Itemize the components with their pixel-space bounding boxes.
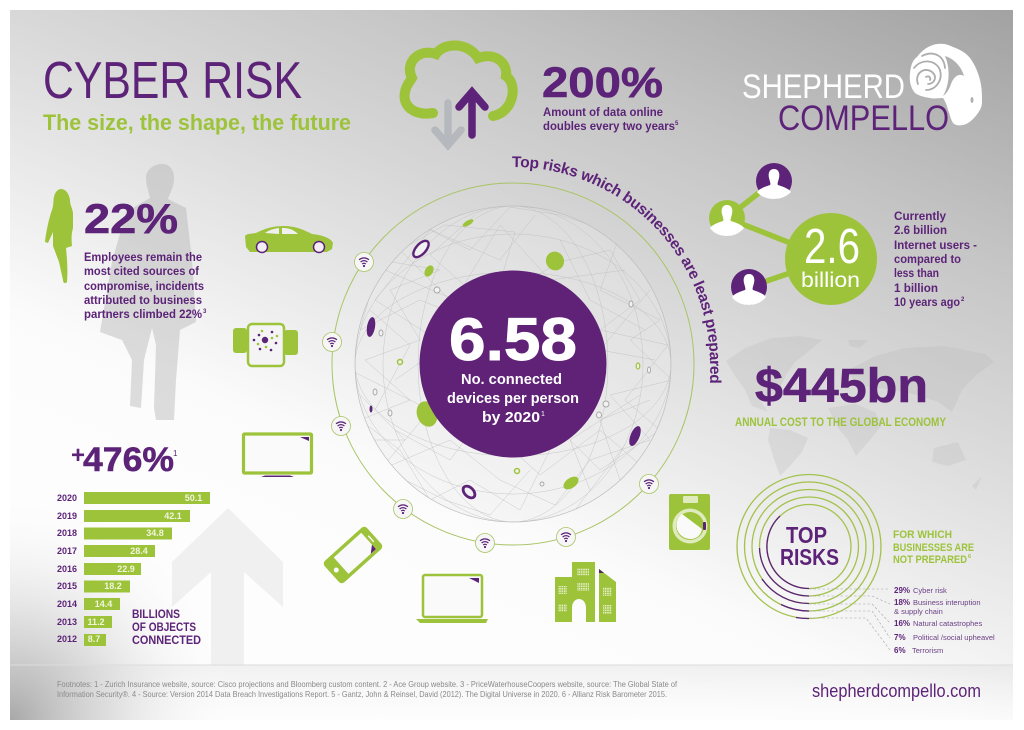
orbit ring [332, 183, 694, 545]
central stat circle: devices per person [447, 390, 579, 407]
list: top risks: Business interuption [913, 598, 981, 607]
logo: Shepherd Compello: COMPELLO [778, 99, 949, 138]
top risks rings: TOP [786, 522, 827, 548]
wifi badges on orbit [322, 252, 658, 552]
subtitle: The size, the shape, the future [43, 110, 351, 135]
bar chart: billions of objects connected: 2020 [57, 493, 77, 503]
website url: shepherdcompello.com [812, 680, 981, 701]
central stat circle: 1 [541, 411, 545, 418]
central stat circle: 6.58 [449, 306, 577, 373]
icon: smartphone [322, 525, 384, 585]
bar chart: billions of objects connected: 2015 [57, 581, 77, 591]
footnotes [57, 679, 678, 699]
stat: 22% employees: Employees remain the [84, 252, 202, 264]
dashed leader lines [809, 589, 890, 650]
chart label: BILLIONS [132, 609, 180, 621]
list: top risks: 29% [894, 586, 910, 595]
icon: washing machine [669, 494, 710, 550]
stat: 200%: 5 [675, 121, 679, 127]
bar chart: billions of objects connected: 2013 [57, 617, 77, 627]
stat: 22% employees: most cited sources of [84, 266, 199, 278]
list: top risks: Terrorism [912, 646, 943, 655]
bar chart: billions of objects connected: 18.2 [104, 581, 122, 591]
central stat circle: No. connected [461, 371, 562, 388]
text: for which businesses are not prepared [893, 529, 974, 566]
top risks rings: RISKS [780, 544, 839, 570]
stat: 200%: Amount of data online [543, 107, 663, 119]
bar chart: billions of objects connected: 50.1 [185, 493, 202, 503]
ghost businessman silhouette [100, 164, 196, 420]
stat: 22% employees: attributed to business [84, 295, 202, 307]
stat: $445bn: ANNUAL COST TO THE GLOBAL ECONOMY [735, 415, 946, 429]
text: for which businesses are not prepared: 6 [968, 554, 971, 560]
text: internet users [894, 211, 977, 309]
text: internet users: Internet users - [894, 240, 977, 252]
footnotes: Information Security®. 4 - Source: Version 2014 Data Breach Investigations Report. 5 - Gantz, John & Reinsel, David (2012). The Digital Universe in 2020. 6 - Allianz Risk Barometer 2015. [57, 689, 667, 699]
text: internet users: less than [894, 268, 939, 280]
stat: 200% [542, 59, 679, 133]
world map backdrop [726, 336, 994, 490]
title [43, 52, 351, 135]
bar chart: billions of objects connected: 2014 [57, 599, 77, 609]
central stat circle: by 2020 [482, 409, 540, 426]
stat: $445bn [735, 360, 946, 429]
icon: car [245, 226, 333, 252]
bar chart: billions of objects connected: 2018 [57, 528, 77, 538]
list: top risks: 18% [894, 598, 910, 607]
text: for which businesses are not prepared: NOT PREPARED [893, 554, 967, 566]
list: top risks: & supply chain [894, 607, 943, 616]
title: CYBER RISK [43, 52, 302, 110]
stat: 22% employees [45, 189, 207, 321]
stat: 22% employees: compromise, incidents [84, 281, 204, 293]
icon: ram head [910, 44, 982, 125]
globe markers [365, 218, 643, 500]
+476% heading: + [71, 442, 85, 469]
icon: office buildings [555, 562, 616, 622]
globe nodes [373, 287, 650, 486]
bar chart: billions of objects connected [57, 492, 210, 647]
footnotes: Footnotes: 1 - Zurich Insurance website, source: Cisco projections and Bloomberg custom content. 2 - Ace Group website. 3 - PriceWaterhouseCoopers website, source: The Global State of [57, 679, 678, 689]
text: for which businesses are not prepared: BUSINESSES ARE [893, 542, 974, 554]
globe network [350, 206, 672, 522]
bar chart: billions of objects connected: 2017 [57, 546, 77, 556]
list: top risks: 7% [894, 633, 906, 642]
list: top risks: Natural catastrophes [913, 619, 982, 628]
ghost arrow backdrop [172, 508, 283, 665]
person node top [756, 163, 792, 199]
+476% heading: 1 [173, 449, 178, 458]
text: internet users: Currently [894, 211, 947, 223]
bar chart: billions of objects connected: 2016 [57, 564, 77, 574]
2.6 billion circle: billion [801, 269, 860, 292]
list: top risks: Cyber risk [913, 586, 947, 595]
person node left [709, 200, 745, 236]
bar chart: billions of objects connected: 2019 [57, 511, 77, 521]
text: internet users: 1 billion [894, 283, 938, 295]
central stat circle [420, 270, 606, 458]
list: top risks: Political /social upheavel [913, 633, 995, 642]
curved heading: top risks: Top risks which businesses are least prepared [512, 156, 722, 383]
bar chart: billions of objects connected: 28.4 [130, 546, 148, 556]
stat: 22% employees: 22% [84, 195, 178, 242]
bar chart: billions of objects connected: 22.9 [117, 564, 135, 574]
bar chart: billions of objects connected: 2012 [57, 634, 77, 644]
logo: Shepherd Compello: SHEPHERD [742, 68, 905, 106]
text: internet users: 2.6 billion [894, 225, 947, 237]
icon: television [244, 434, 312, 477]
text: internet users: compared to [894, 254, 961, 266]
bar chart: billions of objects connected: 14.4 [95, 599, 112, 609]
logo: Shepherd Compello [742, 44, 982, 138]
text: for which businesses are not prepared: FOR WHICH [893, 529, 952, 541]
stat: 22% employees: 3 [203, 309, 207, 315]
icon: cloud with up and down arrows [405, 45, 513, 145]
chart label: OF OBJECTS [132, 622, 196, 634]
bar chart: billions of objects connected: 34.8 [146, 528, 164, 538]
2.6 billion circle: 2.6 [804, 220, 860, 274]
bar chart: billions of objects connected: 8.7 [88, 634, 100, 644]
stat: 200%: doubles every two years [543, 121, 675, 133]
chart label: CONNECTED [132, 635, 201, 647]
list: top risks: 16% [894, 619, 910, 628]
+476% heading: 476% [83, 441, 174, 479]
list: top risks [894, 586, 995, 655]
chart label [132, 609, 201, 647]
icon: green woman silhouette [45, 189, 73, 283]
2.6 billion circle [785, 213, 877, 305]
top risks rings [737, 474, 881, 619]
bar chart: billions of objects connected: 42.1 [164, 511, 182, 521]
stat: $445bn: $445bn [755, 360, 928, 413]
text: internet users: 2 [961, 297, 965, 303]
stat: 200%: 200% [542, 59, 663, 107]
list: top risks: 6% [894, 646, 906, 655]
icon: smart watch [233, 324, 298, 366]
stat: 22% employees: partners climbed 22% [84, 309, 202, 321]
bar chart: billions of objects connected: 11.2 [87, 617, 105, 627]
text: internet users: 10 years ago [894, 297, 960, 309]
people network: 2.6 billion [709, 163, 877, 305]
icon: laptop [416, 575, 488, 623]
person node bottom [731, 269, 767, 305]
